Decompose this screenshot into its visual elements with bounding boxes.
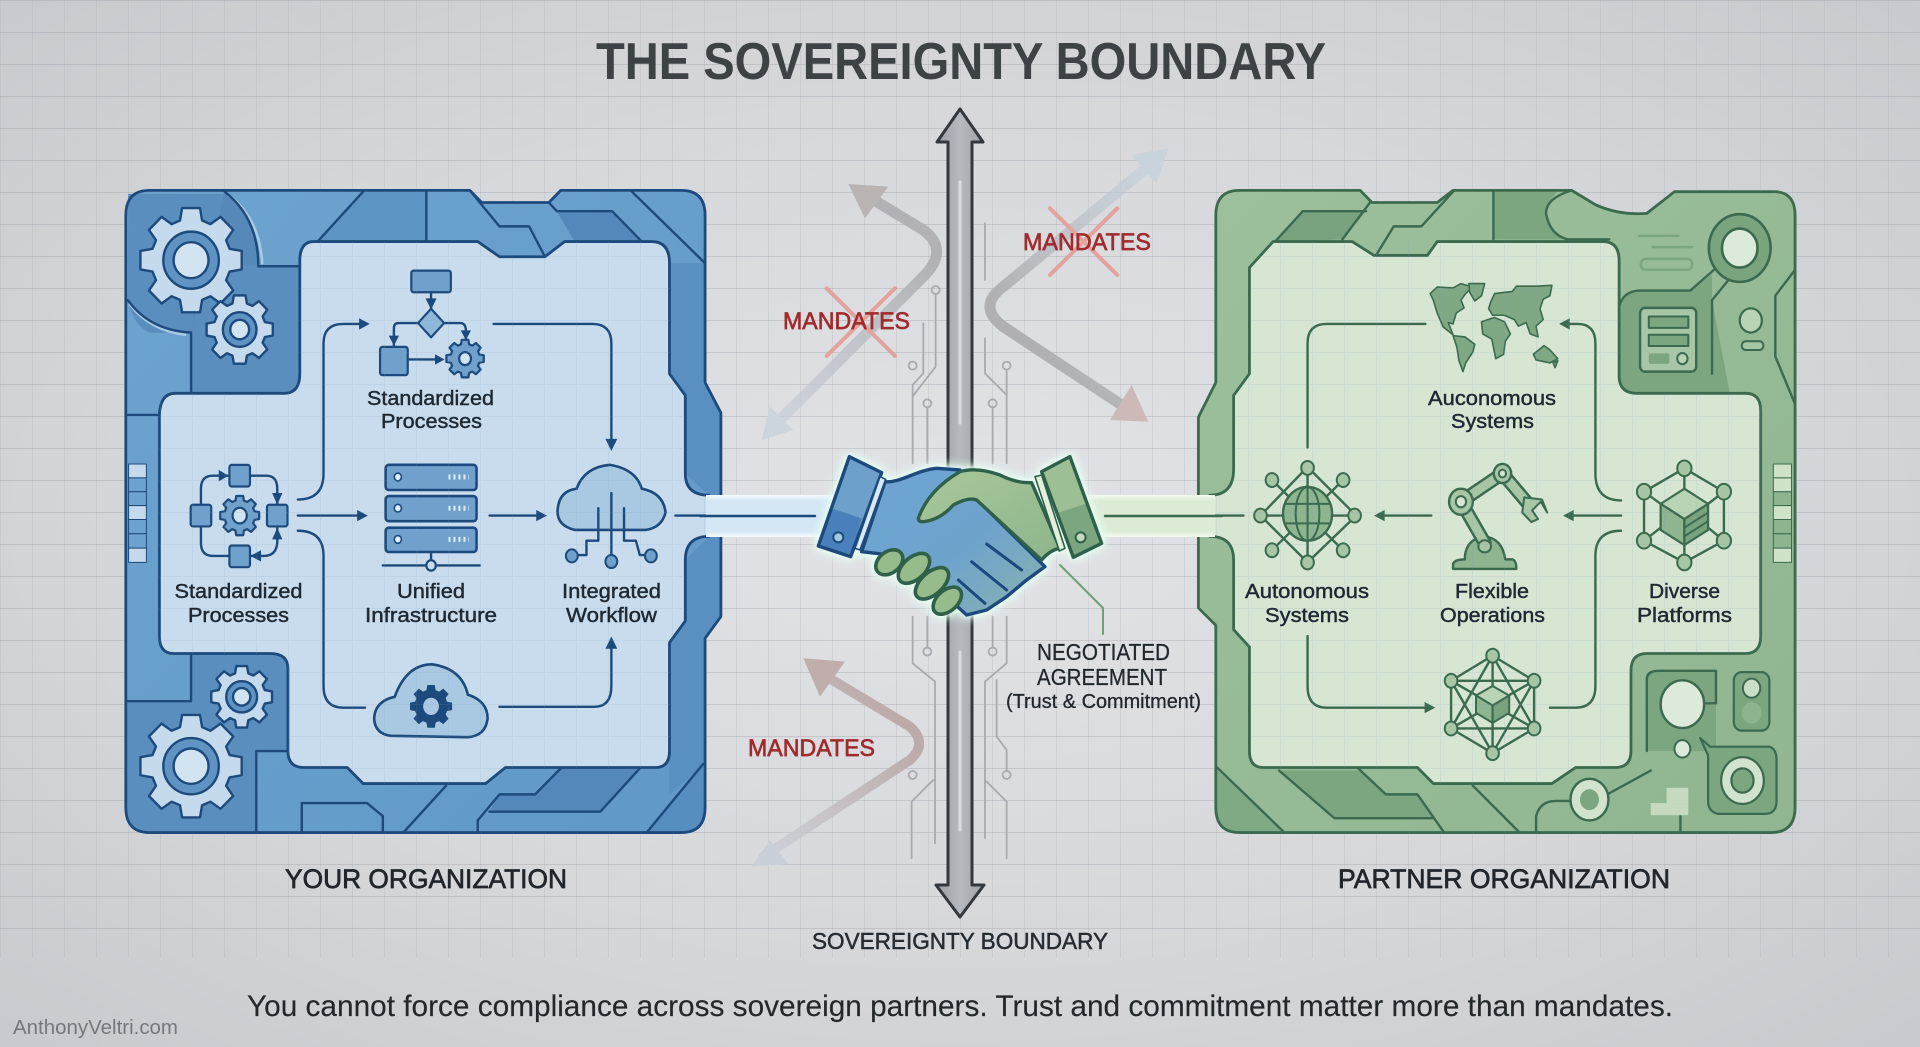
blue cuff xyxy=(818,457,886,557)
sovereignty boundary vertical arrow xyxy=(936,109,984,917)
label: Auconomous Systems: Auconomous xyxy=(1428,388,1556,410)
green inner outline xyxy=(1210,242,1761,784)
label: Standardized Processes top: Standardized xyxy=(367,388,494,410)
label: Diverse Platforms: Platforms xyxy=(1637,605,1732,627)
blue frame decoration xyxy=(127,190,721,831)
icon: world map xyxy=(1430,284,1558,372)
status bars xyxy=(129,464,146,562)
blue flow arrows xyxy=(298,318,730,708)
panel: partner organization xyxy=(1190,190,1795,833)
blue frame outline xyxy=(126,190,721,833)
label: Unified Infrastructure: Unified xyxy=(397,581,465,603)
icon: robot arm xyxy=(1449,464,1547,569)
icon: mesh cube xyxy=(1445,649,1540,760)
heading: sovereignty boundary: SOVEREIGNTY BOUNDARY xyxy=(812,928,1108,954)
label: Standardized Processes left: Processes xyxy=(188,605,289,627)
icon: hexagon cube xyxy=(1637,461,1731,570)
icon: handshake xyxy=(818,457,1102,619)
heading: your organization: YOUR ORGANIZATION xyxy=(285,864,567,894)
blue inner light area xyxy=(159,242,730,784)
connection band: blue xyxy=(706,495,836,537)
icon: flowchart xyxy=(380,271,484,377)
label: Autonomous Systems: Systems xyxy=(1265,605,1349,627)
icon: process loop xyxy=(191,465,288,567)
blue outer frame fill xyxy=(126,190,721,833)
takeaway sentence: You cannot force compliance across sovereign partners. Trust and commitment matter more than mandates. xyxy=(247,990,1673,1023)
blue inner outline xyxy=(159,242,709,784)
leader line: negotiated agreement xyxy=(1060,565,1103,634)
watermark: AnthonyVeltri.com xyxy=(13,1017,178,1039)
green outer frame fill xyxy=(1198,190,1795,833)
icon: integrated workflow cloud xyxy=(558,465,666,568)
blue finger lines xyxy=(958,544,1022,603)
icon: gear bottom large xyxy=(140,715,242,817)
circuit traces around boundary xyxy=(909,223,1011,858)
label: Integrated Workflow: Integrated xyxy=(562,581,661,603)
faint grid over blue inner xyxy=(159,241,730,784)
icon: cloud with gear xyxy=(374,664,488,737)
connection band: green xyxy=(1085,495,1215,537)
green frame outline xyxy=(1198,190,1795,833)
faint grid over green inner xyxy=(1200,242,1761,784)
icon: gear top large xyxy=(140,208,242,312)
label: Flexible Operations: Flexible xyxy=(1455,581,1529,603)
green flow arrows xyxy=(1190,318,1621,713)
icon: gear top small xyxy=(207,295,273,364)
rejected mandate arrow: upper right xyxy=(990,148,1168,422)
label: Unified Infrastructure: Infrastructure xyxy=(365,605,497,627)
label: mandates left: MANDATES xyxy=(783,308,910,335)
panel: your organization xyxy=(126,190,730,833)
label: Standardized Processes top: Processes xyxy=(381,411,482,433)
blue hand xyxy=(862,468,1045,615)
label: Standardized Processes left: Standardized xyxy=(174,581,302,603)
cross mark: left mandate xyxy=(827,288,895,356)
status bars xyxy=(1773,464,1792,562)
title: THE SOVEREIGNTY BOUNDARY xyxy=(596,33,1326,91)
label: negotiated agreement: NEGOTIATED xyxy=(1037,639,1170,665)
label: Diverse Platforms: Diverse xyxy=(1649,581,1720,603)
rejected mandate arrow: lower left xyxy=(752,658,919,867)
icon: server stack xyxy=(383,465,480,571)
green frame decoration xyxy=(1216,190,1795,831)
label: Auconomous Systems: Systems xyxy=(1451,411,1534,433)
rejected mandate arrow: upper left xyxy=(762,184,937,440)
heading: partner organization: PARTNER ORGANIZATION xyxy=(1338,864,1670,894)
icon: globe network xyxy=(1254,461,1361,569)
center lines into handshake xyxy=(700,515,1222,517)
green hand xyxy=(918,470,1060,560)
icon: gear bottom small xyxy=(211,666,272,728)
label: Flexible Operations: Operations xyxy=(1440,605,1545,627)
green cuff xyxy=(1035,457,1102,557)
green fingers xyxy=(871,545,967,619)
green inner light area xyxy=(1190,242,1761,784)
label: mandates right: MANDATES xyxy=(1023,229,1151,256)
label: Autonomous Systems: Autonomous xyxy=(1245,581,1369,603)
label: negotiated agreement: (Trust & Commitment) xyxy=(1006,691,1201,713)
cross mark: right mandate xyxy=(1050,208,1117,275)
label: negotiated agreement: AGREEMENT xyxy=(1037,664,1167,690)
label: Integrated Workflow: Workflow xyxy=(566,605,658,627)
label: mandates lower: MANDATES xyxy=(748,735,875,762)
